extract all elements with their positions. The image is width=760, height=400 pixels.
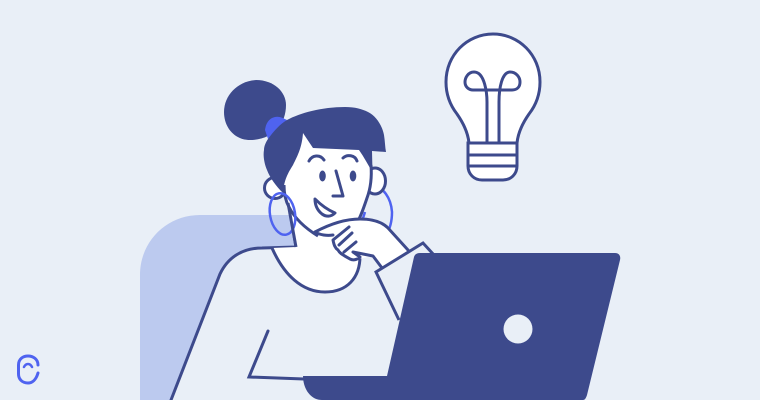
nose <box>333 171 343 196</box>
right eyebrow <box>343 156 357 161</box>
laptop screen <box>382 253 620 400</box>
left eye <box>319 170 326 182</box>
hair bun <box>224 80 286 140</box>
front earring <box>267 191 298 237</box>
neckline <box>272 248 360 292</box>
laptop <box>303 253 620 400</box>
bulb base threads <box>468 155 517 166</box>
right eye <box>350 170 356 182</box>
hand <box>315 219 408 268</box>
hair tie <box>265 117 287 139</box>
torso <box>171 203 420 400</box>
icon: light bulb <box>446 34 540 180</box>
bulb glass <box>446 34 540 143</box>
icon: brand logo <box>18 356 38 383</box>
left ear <box>264 178 286 198</box>
torso outline <box>171 200 304 400</box>
neck and chest skin <box>272 205 361 292</box>
laptop logo <box>504 314 532 344</box>
back earring <box>361 187 392 235</box>
mouth <box>315 199 335 216</box>
bulb filament <box>465 72 520 143</box>
chair back <box>140 215 300 400</box>
neck line over earring <box>288 203 296 247</box>
sleeve outline <box>376 243 434 320</box>
face <box>283 133 371 240</box>
woman figure <box>171 80 435 400</box>
hand outline <box>315 219 408 268</box>
face outline <box>284 165 371 236</box>
laptop base <box>303 376 390 400</box>
sleeve <box>377 243 435 340</box>
left eyebrow <box>309 156 324 161</box>
bulb base <box>468 143 517 180</box>
right ear <box>364 168 386 194</box>
hair <box>264 107 386 193</box>
